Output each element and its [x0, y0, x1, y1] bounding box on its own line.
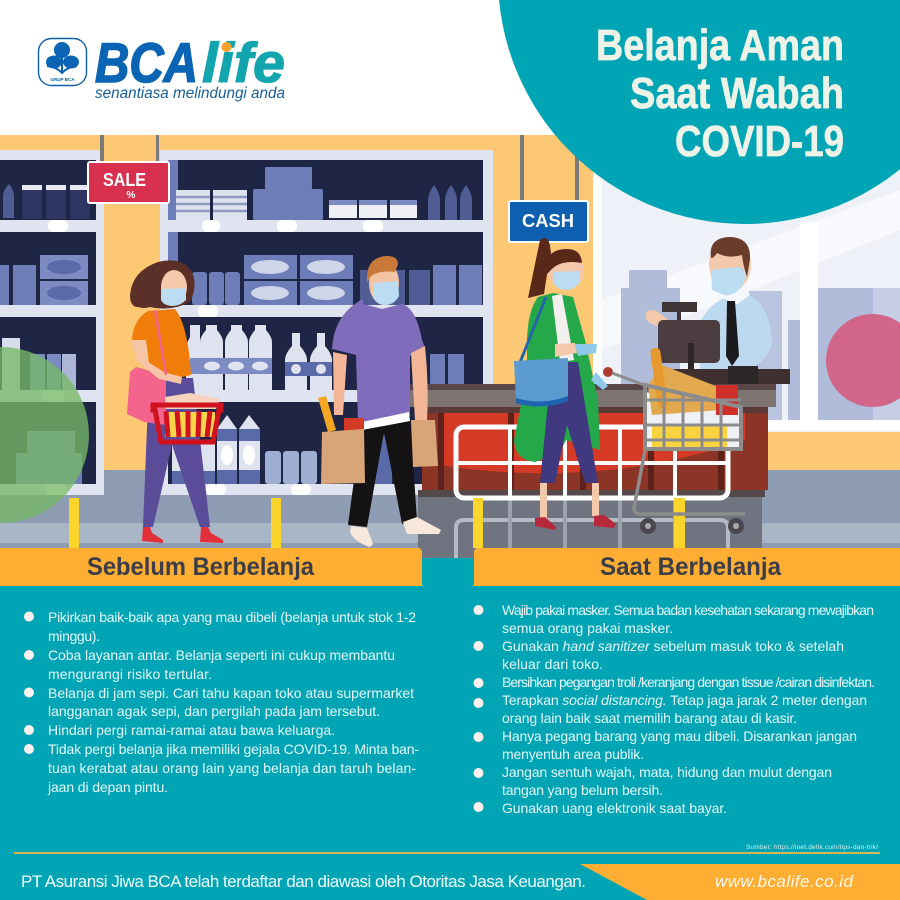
row 2 goods — [192, 255, 482, 305]
window with city view — [593, 135, 900, 470]
bullets — [474, 605, 484, 812]
heading bar: Sebelum Berbelanja — [0, 548, 422, 586]
list lines: jaan di depan pintu. — [47, 779, 168, 795]
list lines: tuan kerabat atau orang lain yang belanja dan taruh belan- — [48, 760, 416, 776]
teal title circle — [498, 0, 900, 224]
bag strap — [519, 297, 546, 365]
logo life: life — [202, 31, 285, 94]
sale sign — [88, 135, 169, 203]
title: COVID-19 — [675, 117, 844, 166]
logo dot — [222, 42, 232, 52]
green translucent circle — [0, 347, 89, 523]
checkout counter — [410, 384, 776, 558]
wall — [0, 135, 600, 475]
green coat — [514, 293, 600, 462]
title: Belanja Aman — [596, 21, 844, 70]
list lines: mengurangi risiko tertular. — [48, 666, 212, 682]
source note: Sumber: https://inet.detik.com/tips-dan-trik/ — [746, 844, 878, 851]
list lines: menyentuh area publik. — [502, 746, 644, 762]
floor — [0, 470, 900, 560]
list lines: tangan yang belum bersih. — [502, 782, 663, 798]
list lines: Tidak pergi belanja jika memiliki gejala COVID-19. Minta ban- — [48, 741, 419, 757]
shoes — [535, 517, 556, 530]
logo wordmark: BCA — [95, 31, 198, 94]
heading bar: Saat Berbelanja: Saat Berbelanja — [600, 553, 782, 581]
footer disclaimer: PT Asuransi Jiwa BCA telah terdaftar dan diawasi oleh Otoritas Jasa Keuangan. — [21, 872, 586, 891]
list lines: Hindari pergi ramai-ramai atau bawa keluarga. — [48, 722, 335, 738]
title: Saat Wabah — [630, 69, 844, 118]
logo: BCA life — [38, 31, 285, 102]
red basket — [153, 405, 221, 442]
pink circle — [826, 314, 900, 407]
heading bar: Sebelum Berbelanja: Sebelum Berbelanja — [87, 553, 315, 581]
shirt — [132, 309, 191, 378]
footer divider line — [14, 852, 880, 854]
heading bar: Saat Berbelanja — [474, 548, 900, 586]
footer website: www.bcalife.co.id — [715, 872, 854, 891]
illustration: supermarket scene — [0, 135, 900, 560]
text block: saat berbelanja list — [474, 602, 875, 816]
cashier — [646, 237, 790, 384]
arm — [131, 340, 182, 384]
list lines: Jangan sentuh wajah, mata, hidung dan mulut dengan — [502, 764, 832, 780]
list lines: Wajib pakai masker. Semua badan kesehatan sekarang mewajibkan — [502, 602, 874, 618]
pink bag — [127, 367, 166, 425]
list lines: orang lain baik saat memilih barang atau di kasir. — [502, 710, 797, 726]
list lines: Terapkan social distancing. Tetap jaga jarak 2 meter dengan — [502, 692, 867, 708]
teal body panel — [0, 558, 900, 900]
list lines — [502, 602, 875, 816]
text block: sebelum berbelanja list — [24, 609, 419, 795]
logo emblem — [38, 38, 86, 86]
man with shopping bags — [318, 256, 441, 547]
woman at checkout — [514, 238, 616, 530]
list lines: Belanja di jam sepi. Cari tahu kapan toko atau supermarket — [48, 685, 414, 701]
list lines: Pikirkan baik-baik apa yang mau dibeli (belanja untuk stok 1-2 — [48, 609, 416, 625]
list lines: Gunakan hand sanitizer sebelum masuk toko & setelah — [502, 638, 844, 654]
bullets — [24, 612, 34, 754]
logo tagline: senantiasa melindungi anda — [95, 85, 285, 102]
cash sign: CASH — [522, 211, 574, 231]
left shelf unit — [0, 150, 104, 495]
legs — [540, 483, 547, 518]
logo emblem: GRUP BCA — [51, 77, 75, 82]
arm and gloves — [555, 343, 577, 357]
hair — [130, 260, 195, 309]
footer orange corner — [580, 864, 900, 900]
title — [596, 21, 844, 166]
row 4 cartons and cans — [172, 415, 392, 484]
sale sign: SALE — [103, 170, 146, 190]
woman with basket — [127, 260, 223, 543]
list lines: Coba layanan antar. Belanja seperti ini cukup membantu — [48, 647, 395, 663]
bag strap — [155, 310, 166, 375]
inner top — [552, 294, 574, 362]
right shelf unit — [160, 150, 493, 495]
row 1 goods — [176, 167, 472, 220]
shopping cart — [603, 348, 745, 534]
sale sign: % — [127, 190, 136, 201]
yellow floor posts — [69, 498, 685, 548]
trousers — [143, 378, 210, 527]
list lines: semua orang pakai masker. — [502, 620, 673, 636]
list lines: Hanya pegang barang yang mau dibeli. Disarankan jangan — [502, 728, 857, 744]
trousers — [540, 362, 598, 483]
blue bag — [514, 358, 568, 406]
row 3 milk bottles — [186, 325, 464, 390]
list lines: Gunakan uang elektronik saat bayar. — [502, 800, 727, 816]
list lines — [47, 609, 419, 795]
list lines: keluar dari toko. — [502, 656, 603, 672]
ponytail — [528, 238, 556, 298]
head — [548, 252, 584, 290]
sneakers — [142, 527, 163, 543]
list lines: minggu). — [48, 628, 100, 644]
cash sign — [509, 135, 588, 242]
list lines: langganan agak sepi, dan pergilah pada jam tersebut. — [48, 703, 380, 719]
groceries — [165, 393, 220, 409]
list lines: Bersihkan pegangan troli /keranjang dengan tissue /cairan disinfektan. — [502, 674, 875, 690]
